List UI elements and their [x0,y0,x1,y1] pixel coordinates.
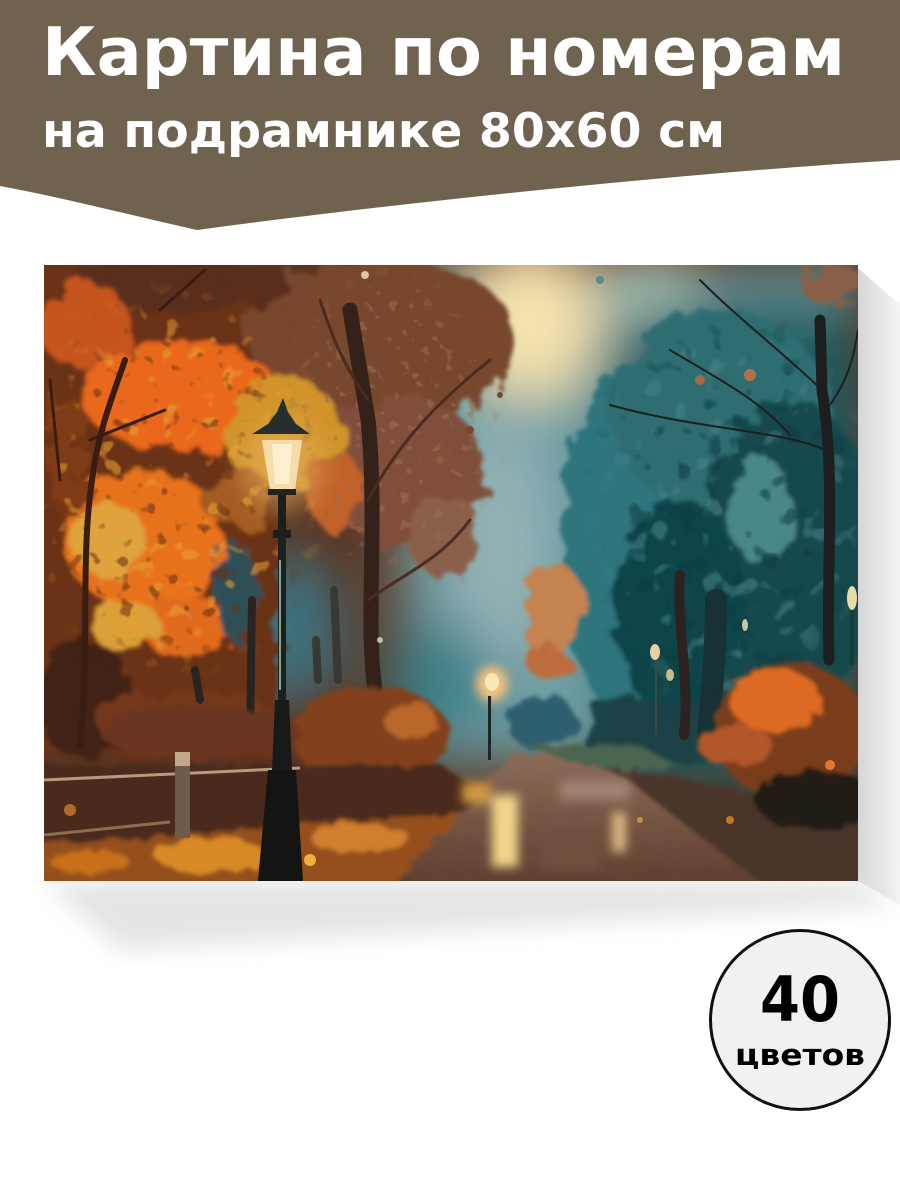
badge: 40 colours: цветов [735,1038,865,1072]
painting distant lamps [476,586,857,760]
painting fence and post [44,752,300,838]
painting bushes and bottom ground [36,662,875,890]
painting: autumn park with street lamp [30,240,880,890]
painting sky and misty background [235,240,860,780]
header banner [0,0,900,230]
title: Картина по номерам [42,13,845,91]
painting middle tree foliage speckle [288,286,500,568]
subtitle: на подрамнике 80х60 см [42,104,725,159]
painting right teal forest [505,263,880,760]
canvas drop shadow [44,268,900,950]
painting road reflections [462,780,630,869]
badge: 40 colours: 40 [760,963,840,1036]
painting right tree trunks [610,280,858,735]
painting falling leaves [64,271,835,866]
painting right forest mottling [604,324,857,692]
badge: 40 colours [710,930,890,1110]
painting left autumn trees [30,255,515,760]
painting left trunks and branches [50,270,490,745]
painting left foliage mottling [44,286,326,672]
painting main street lamp [242,398,322,881]
